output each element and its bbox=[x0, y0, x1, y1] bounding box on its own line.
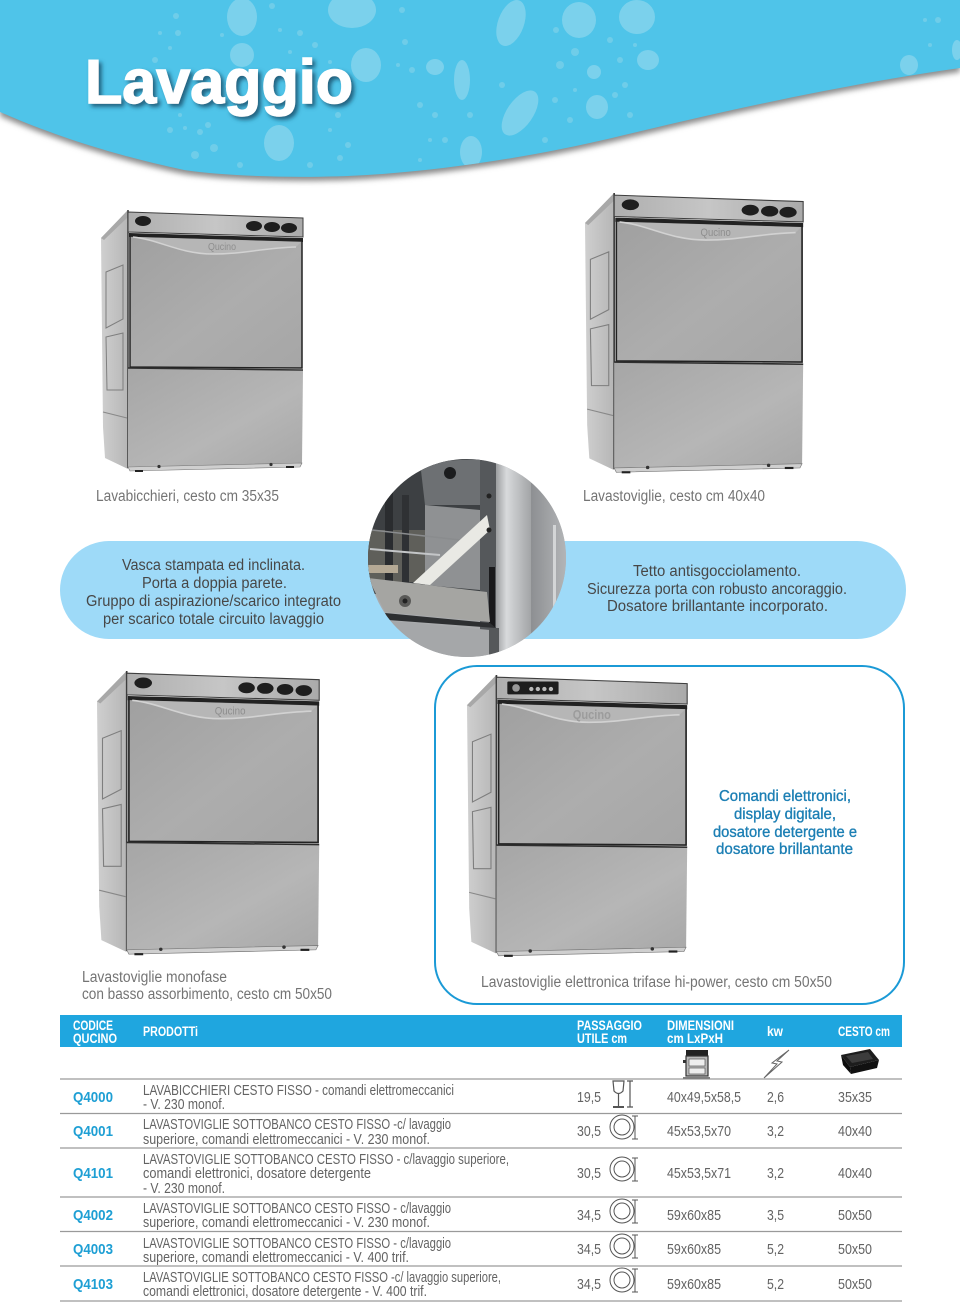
water drops bbox=[152, 0, 960, 168]
row Q4003: 5,2 bbox=[767, 1242, 784, 1258]
row Q4001: 3,2 bbox=[767, 1124, 784, 1140]
feature band bbox=[60, 541, 906, 639]
row Q4101: 40x40 bbox=[838, 1166, 872, 1182]
feature text left: Gruppo di aspirazione/scarico integrato bbox=[86, 593, 341, 610]
icon: machine dimensions bbox=[683, 1050, 710, 1078]
product image: monophase dishwasher: Qucino bbox=[215, 705, 245, 717]
row Q4101: 30,5 bbox=[577, 1166, 601, 1182]
caption: monophase dishwasher bbox=[82, 969, 332, 1003]
title: Lavaggio bbox=[85, 48, 353, 117]
row Q4001: 45x53,5x70 bbox=[667, 1124, 731, 1140]
table header: DIMENSIONI bbox=[667, 1018, 734, 1033]
table header: kw bbox=[767, 1024, 783, 1039]
product image: dishwasher 40x40 bbox=[585, 193, 803, 473]
caption: glass washer: Lavabicchieri, cesto cm 35x35 bbox=[96, 488, 279, 505]
feature text right: Dosatore brillantante incorporato. bbox=[607, 598, 828, 615]
product table bbox=[60, 1015, 902, 1301]
row Q4101: 45x53,5x71 bbox=[667, 1166, 731, 1182]
row Q4000: LAVABICCHIERI CESTO FISSO - comandi elettromeccanici bbox=[143, 1083, 454, 1099]
row Q4103: Q4103 bbox=[73, 1276, 113, 1293]
row Q4003 bbox=[73, 1234, 872, 1266]
row Q4002: 3,5 bbox=[767, 1208, 784, 1224]
row Q4101: comandi elettronici, dosatore detergente bbox=[143, 1166, 371, 1182]
row Q4101: LAVASTOVIGLIE SOTTOBANCO CESTO FISSO - c/lavaggio superiore, bbox=[143, 1152, 509, 1168]
row Q4003: LAVASTOVIGLIE SOTTOBANCO CESTO FISSO - c/lavaggio bbox=[143, 1236, 451, 1252]
row Q4002: Q4002 bbox=[73, 1207, 113, 1224]
table header: PRODOTTi bbox=[143, 1024, 198, 1039]
feature text left: Vasca stampata ed inclinata. bbox=[122, 557, 305, 574]
table header: CESTO cm bbox=[838, 1024, 890, 1039]
icon: plate bbox=[610, 1268, 638, 1292]
header wave background with water drops bbox=[0, 0, 960, 181]
callout: electronic controls: Comandi elettronici, bbox=[719, 788, 851, 805]
row Q4001 bbox=[73, 1115, 872, 1148]
row Q4103: LAVASTOVIGLIE SOTTOBANCO CESTO FISSO -c/ lavaggio superiore, bbox=[143, 1270, 501, 1286]
caption: monophase dishwasher: con basso assorbimento, cesto cm 50x50 bbox=[82, 986, 332, 1003]
table header: PASSAGGIO bbox=[577, 1018, 642, 1033]
table header: QUCINO bbox=[73, 1031, 117, 1046]
callout: electronic controls: display digitale, bbox=[734, 806, 836, 823]
table header: CODICE bbox=[73, 1018, 113, 1033]
icon: basket bbox=[841, 1049, 879, 1074]
callout: electronic controls: dosatore brillantante bbox=[716, 841, 853, 858]
row Q4000 bbox=[73, 1081, 872, 1113]
caption: monophase dishwasher: Lavastoviglie monofase bbox=[82, 969, 227, 986]
caption: hi-power dishwasher: Lavastoviglie elettronica trifase hi-power, cesto cm 50x50 bbox=[481, 974, 832, 991]
row Q4101: 3,2 bbox=[767, 1166, 784, 1182]
row Q4103 bbox=[73, 1268, 872, 1300]
row Q4103: 50x50 bbox=[838, 1277, 872, 1293]
row Q4003: superiore, comandi elettromeccanici - V. 400 trif. bbox=[143, 1250, 409, 1266]
product image: monophase dishwasher bbox=[97, 671, 319, 955]
row Q4003: 59x60x85 bbox=[667, 1242, 721, 1258]
feature text left bbox=[86, 557, 341, 628]
icon: power bolt bbox=[764, 1050, 789, 1078]
row Q4003: 50x50 bbox=[838, 1242, 872, 1258]
table header: UTILE cm bbox=[577, 1031, 627, 1046]
row Q4000: 40x49,5x58,5 bbox=[667, 1090, 741, 1106]
row Q4001: LAVASTOVIGLIE SOTTOBANCO CESTO FISSO -c/ lavaggio bbox=[143, 1117, 451, 1133]
panel: hi-power dishwasher bbox=[435, 666, 904, 1004]
row Q4001: 40x40 bbox=[838, 1124, 872, 1140]
row Q4001: Q4001 bbox=[73, 1123, 113, 1140]
table header bbox=[60, 1015, 902, 1047]
row Q4001: 30,5 bbox=[577, 1124, 601, 1140]
table rules bbox=[60, 1079, 902, 1301]
row Q4103: 5,2 bbox=[767, 1277, 784, 1293]
row Q4103: comandi elettronici, dosatore detergente - V. 400 trif. bbox=[143, 1284, 427, 1300]
feature text right bbox=[587, 563, 847, 615]
row Q4000: - V. 230 monof. bbox=[143, 1097, 225, 1113]
row Q4000: 35x35 bbox=[838, 1090, 872, 1106]
feature text right: Sicurezza porta con robusto ancoraggio. bbox=[587, 581, 847, 598]
row Q4000: Q4000 bbox=[73, 1089, 113, 1106]
row Q4002: superiore, comandi elettromeccanici - V. 230 monof. bbox=[143, 1215, 430, 1231]
product image: glass washer: Qucino bbox=[208, 242, 236, 253]
feature text left: Porta a doppia parete. bbox=[142, 575, 287, 592]
row Q4003: Q4003 bbox=[73, 1241, 113, 1258]
row Q4001: superiore, comandi elettromeccanici - V. 230 monof. bbox=[143, 1132, 430, 1148]
row Q4002: 59x60x85 bbox=[667, 1208, 721, 1224]
row Q4002 bbox=[73, 1199, 872, 1231]
row Q4003: 34,5 bbox=[577, 1242, 601, 1258]
icon: plate bbox=[610, 1157, 638, 1181]
icon: plate bbox=[610, 1115, 638, 1139]
row Q4000: 19,5 bbox=[577, 1090, 601, 1106]
product image: electronic dishwasher: Qucino bbox=[573, 707, 611, 722]
icon: plate bbox=[610, 1234, 638, 1258]
row Q4101: - V. 230 monof. bbox=[143, 1181, 225, 1197]
caption: dishwasher 40x40: Lavastoviglie, cesto cm 40x40 bbox=[583, 488, 765, 505]
icon: plate bbox=[610, 1199, 638, 1223]
product image: electronic dishwasher bbox=[467, 675, 687, 957]
product image: dishwasher 40x40: Qucino bbox=[701, 227, 731, 239]
callout: electronic controls: dosatore detergente e bbox=[713, 824, 857, 841]
feature text right: Tetto antisgocciolamento. bbox=[633, 563, 801, 580]
icon: glass bbox=[613, 1081, 633, 1107]
row Q4002: LAVASTOVIGLIE SOTTOBANCO CESTO FISSO - c/lavaggio bbox=[143, 1201, 451, 1217]
circular detail photo bbox=[368, 459, 568, 657]
callout: electronic controls bbox=[713, 788, 857, 858]
feature text left: per scarico totale circuito lavaggio bbox=[103, 611, 324, 628]
row Q4002: 50x50 bbox=[838, 1208, 872, 1224]
product image: glass washer bbox=[101, 210, 303, 472]
row Q4002: 34,5 bbox=[577, 1208, 601, 1224]
row Q4101: Q4101 bbox=[73, 1165, 113, 1182]
row Q4103: 59x60x85 bbox=[667, 1277, 721, 1293]
row Q4103: 34,5 bbox=[577, 1277, 601, 1293]
row Q4000: 2,6 bbox=[767, 1090, 784, 1106]
row Q4101 bbox=[73, 1152, 872, 1197]
table header: cm LxPxH bbox=[667, 1031, 723, 1046]
